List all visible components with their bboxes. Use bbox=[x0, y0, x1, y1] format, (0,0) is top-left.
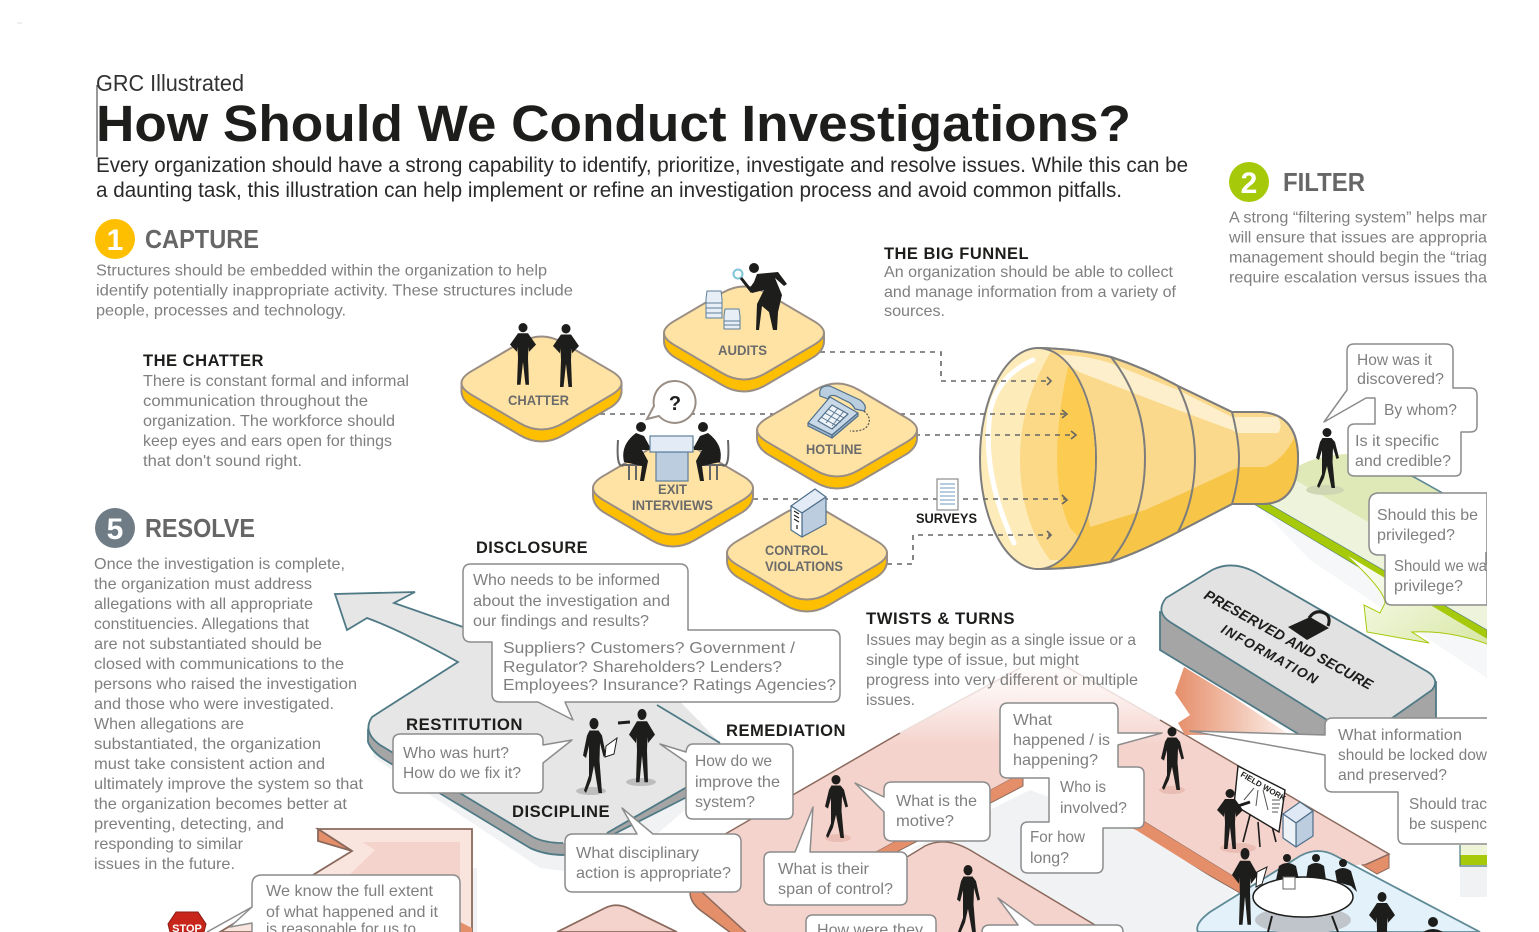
icon: auditor with magnifier bbox=[734, 263, 787, 330]
panel: blue meeting platform bbox=[1197, 851, 1480, 932]
bubble group: how was it discovered: How was it bbox=[1357, 352, 1433, 369]
bubble: disclosure questions: about the investigation and bbox=[473, 593, 670, 610]
capture text: identify potentially inappropriate activity. These structures include bbox=[96, 282, 573, 300]
bubble: motive bbox=[855, 782, 990, 841]
bubble: remediation: How do we bbox=[695, 753, 772, 770]
icon: field work board and presenter bbox=[1217, 766, 1288, 853]
bubble group: how was it discovered: By whom? bbox=[1384, 402, 1457, 419]
bubble: remediation: system? bbox=[695, 794, 755, 811]
heading: remediation: REMEDIATION bbox=[726, 721, 846, 740]
bubble: disclosure questions: our findings and results? bbox=[473, 613, 649, 630]
icon: telephone bbox=[808, 386, 869, 438]
resolve text bbox=[94, 556, 364, 873]
twists and turns text: progress into very different or multiple bbox=[866, 672, 1138, 689]
filter text: A strong “filtering system” helps mar bbox=[1229, 210, 1488, 226]
bubble group: what happened: For how bbox=[1030, 829, 1085, 846]
panel: resolve heading: 5 bbox=[107, 513, 123, 546]
resolve text: the organization must address bbox=[94, 576, 312, 593]
bubble group: how was it discovered: and credible? bbox=[1355, 453, 1451, 470]
the chatter text: organization. The workforce should bbox=[143, 413, 395, 430]
bubble group: what information bbox=[1190, 718, 1490, 844]
bubble group: what happened: long? bbox=[1030, 850, 1069, 867]
bubble group: privileged: Should we wa bbox=[1394, 558, 1487, 575]
resolve text: responding to similar bbox=[94, 836, 244, 853]
heading: discipline: DISCIPLINE bbox=[512, 802, 610, 821]
eyebrow: GRC Illustrated: GRC Illustrated bbox=[96, 70, 244, 96]
bubble group: how was it discovered: Is it specific bbox=[1355, 433, 1439, 450]
icon: document stacks bbox=[706, 291, 740, 329]
bubble group: what information: Should trac bbox=[1409, 796, 1487, 813]
diamond: exit interviews: INTERVIEWS bbox=[632, 497, 713, 513]
diamond: hotline: HOTLINE bbox=[806, 441, 862, 457]
bubble: disclosure questions: Who needs to be informed bbox=[473, 572, 660, 589]
bubble group: what information: be suspenc bbox=[1409, 816, 1487, 833]
bubble: disclosure questions bbox=[463, 564, 840, 720]
icon: surveys document bbox=[937, 479, 958, 510]
resolve text: closed with communications to the bbox=[94, 656, 344, 673]
bubble group: what happened: Who is bbox=[1060, 779, 1106, 796]
figures: meeting around round table bbox=[1232, 848, 1443, 932]
capture text bbox=[96, 262, 573, 320]
bubble group: how was it discovered bbox=[1324, 344, 1477, 476]
twists and turns text: Issues may begin as a single issue or a bbox=[866, 632, 1136, 649]
pink path: lower-left peak bbox=[557, 905, 677, 932]
bubble group: privileged: Should this be bbox=[1377, 507, 1478, 524]
bubble group: what information: should be locked dow bbox=[1338, 747, 1487, 764]
figures: exit interview at desk bbox=[618, 422, 728, 481]
figures: chatter bbox=[510, 323, 579, 387]
bubble group: what happened: happened / is bbox=[1013, 732, 1110, 749]
the big funnel text bbox=[884, 248, 1176, 316]
twists and turns text: single type of issue, but might bbox=[866, 652, 1080, 669]
panel: green filter platform bbox=[1252, 454, 1490, 678]
twists and turns text bbox=[866, 609, 1138, 709]
resolve text: issues in the future. bbox=[94, 856, 235, 873]
panel: investigate pink path bbox=[690, 661, 1389, 932]
diamond: control violations bbox=[727, 506, 887, 612]
capture text: Structures should be embedded within the organization to help bbox=[96, 262, 547, 280]
dashed connector lines bbox=[600, 352, 1076, 564]
bubble: motive: What is the bbox=[896, 793, 977, 810]
bubble group: what happened: happening? bbox=[1013, 752, 1098, 769]
panel: filter heading bbox=[1229, 162, 1365, 202]
decorative top-left mark bbox=[17, 22, 22, 24]
the chatter text: keep eyes and ears open for things bbox=[143, 433, 392, 450]
bubble: we know the full extent bbox=[207, 875, 460, 932]
resolve text: and those who were investigated. bbox=[94, 696, 334, 713]
bubble group: how was it discovered: discovered? bbox=[1357, 371, 1444, 388]
resolve text: are not substantiated should be bbox=[94, 636, 322, 653]
panel: capture heading: 1 bbox=[107, 224, 123, 257]
bubble: we know the full extent: We know the full extent bbox=[266, 883, 434, 900]
diamond: chatter bbox=[462, 336, 622, 442]
twists and turns text: TWISTS & TURNS bbox=[866, 609, 1015, 628]
bubble: span of control: span of control? bbox=[778, 881, 893, 898]
the chatter text: communication throughout the bbox=[143, 393, 368, 410]
heading: restitution: RESTITUTION bbox=[406, 715, 523, 734]
panel: preserved and secure platform: PRESERVED AND SECURE bbox=[1201, 588, 1376, 694]
bubble: discipline: What disciplinary bbox=[576, 845, 699, 862]
bubble: motive: motive? bbox=[896, 813, 954, 830]
diamond: control violations: CONTROL bbox=[765, 542, 828, 558]
panel: resolve heading: RESOLVE bbox=[145, 513, 255, 543]
capture text: people, processes and technology. bbox=[96, 302, 346, 320]
icon: padlock bbox=[1288, 612, 1329, 640]
resolve text: allegations with all appropriate bbox=[94, 596, 313, 613]
bubble: restitution: Who was hurt? bbox=[403, 745, 509, 762]
bubble: how were they bbox=[806, 915, 936, 932]
bubble group: what happened: involved? bbox=[1060, 800, 1127, 817]
bubble group: what happened bbox=[1000, 703, 1162, 873]
resolve text: the organization becomes better at bbox=[94, 796, 348, 813]
diamond: hotline bbox=[757, 384, 917, 488]
figure: filter investigator bbox=[1306, 428, 1344, 495]
caret line beside title bbox=[96, 85, 98, 157]
panel: capture heading bbox=[95, 219, 259, 259]
title: How Should We Conduct Investigations? bbox=[96, 95, 1131, 152]
bubble: we know the full extent: of what happened and it bbox=[266, 904, 439, 921]
the chatter text bbox=[143, 351, 409, 470]
bubble group: what information: What information bbox=[1338, 727, 1462, 744]
bubble group: what happened: What bbox=[1013, 712, 1053, 729]
panel: resolve heading bbox=[95, 508, 255, 548]
bubble: restitution bbox=[393, 734, 572, 793]
resolve text: must take consistent action and bbox=[94, 756, 325, 773]
bubble group: privileged bbox=[1369, 493, 1487, 605]
filter text: will ensure that issues are appropria bbox=[1228, 230, 1487, 246]
intro text: a daunting task, this illustration can help implement or refine an investigation process and avoid common pitfalls. bbox=[96, 179, 1122, 202]
panel: resolve arrow pink bbox=[220, 829, 477, 932]
icon: server tower bbox=[791, 489, 826, 537]
bubble: discipline bbox=[565, 808, 741, 892]
the big funnel text: THE BIG FUNNEL bbox=[884, 244, 1029, 263]
resolve text: ultimately improve the system so that bbox=[94, 776, 364, 793]
dialog bubble with question mark bbox=[647, 381, 696, 423]
resolve text: When allegations are bbox=[94, 716, 244, 733]
diamond: control violations: VIOLATIONS bbox=[765, 558, 843, 574]
resolve text: constituencies. Allegations that bbox=[94, 616, 310, 633]
figures: investigators bbox=[825, 727, 1185, 932]
bubble: span of control: What is their bbox=[778, 861, 870, 878]
green platform continuation bbox=[1460, 845, 1490, 897]
resolve text: preventing, detecting, and bbox=[94, 816, 284, 833]
twists and turns text: issues. bbox=[866, 692, 915, 709]
label: surveys: SURVEYS bbox=[916, 511, 977, 526]
diamond: exit interviews: EXIT bbox=[658, 481, 687, 497]
panel: gray resolve platform and arrow bbox=[335, 592, 720, 873]
diamond: chatter: CHATTER bbox=[508, 392, 569, 408]
bubble: disclosure questions: Regulator? Shareholders? Lenders? bbox=[503, 659, 782, 676]
diamond: audits bbox=[664, 286, 824, 392]
intro text: Every organization should have a strong capability to identify, prioritize, investigate and resolve issues. While this can be bbox=[96, 154, 1188, 177]
bubble: clipped bottom bbox=[982, 898, 1123, 932]
bubble: restitution: How do we fix it? bbox=[403, 765, 521, 782]
bubble: remediation bbox=[660, 744, 793, 819]
bubble: span of control bbox=[764, 807, 907, 905]
figures: resolve team bbox=[576, 709, 656, 795]
the big funnel text: sources. bbox=[884, 303, 945, 320]
bubble group: privileged: privilege? bbox=[1394, 578, 1463, 595]
bubble: disclosure questions: Suppliers? Customers? Government / bbox=[503, 640, 796, 657]
panel: filter heading: FILTER bbox=[1283, 167, 1365, 197]
bubble: disclosure questions: Employees? Insurance? Ratings Agencies? bbox=[503, 677, 836, 694]
bubble group: what information: and preserved? bbox=[1338, 767, 1447, 784]
resolve text: substantiated, the organization bbox=[94, 736, 321, 753]
heading: disclosure: DISCLOSURE bbox=[476, 538, 588, 557]
the chatter text: that don't sound right. bbox=[143, 453, 302, 470]
bubble group: privileged: privileged? bbox=[1377, 527, 1455, 544]
diamond: audits: AUDITS bbox=[718, 342, 767, 358]
the big funnel text: An organization should be able to collect bbox=[884, 264, 1174, 281]
bubble: discipline: action is appropriate? bbox=[576, 865, 731, 882]
dialog bubble with question mark: ? bbox=[669, 393, 681, 415]
panel: filter heading: 2 bbox=[1241, 167, 1257, 200]
panel: preserved and secure platform bbox=[1160, 565, 1436, 735]
resolve text: Once the investigation is complete, bbox=[94, 556, 345, 573]
filter text: management should begin the “triag bbox=[1229, 250, 1487, 266]
the big funnel text: and manage information from a variety of bbox=[884, 284, 1177, 301]
resolve text: persons who raised the investigation bbox=[94, 676, 357, 693]
icon: filing cabinet bbox=[1283, 802, 1313, 847]
panel: preserved and secure platform: INFORMATION bbox=[1219, 622, 1320, 687]
diamond: exit interviews bbox=[593, 442, 753, 546]
bubble: remediation: improve the bbox=[695, 774, 780, 791]
the chatter text: THE CHATTER bbox=[143, 351, 264, 370]
filter text: require escalation versus issues tha bbox=[1229, 270, 1487, 286]
the chatter text: There is constant formal and informal bbox=[143, 373, 409, 390]
panel: capture heading: CAPTURE bbox=[145, 224, 259, 254]
funnel bbox=[980, 345, 1298, 570]
intro text bbox=[96, 154, 1188, 202]
icon: field work board and presenter: FIELD WORK bbox=[1239, 770, 1288, 803]
icon: stop sign bbox=[168, 912, 206, 932]
filter text bbox=[1228, 210, 1488, 286]
